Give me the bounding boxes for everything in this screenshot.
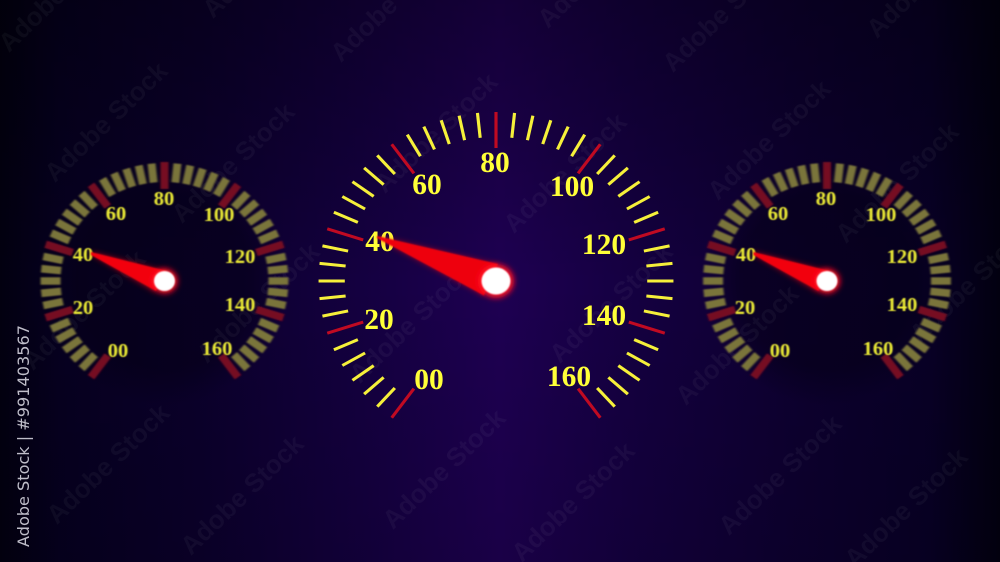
right gauge speed labels	[735, 188, 917, 362]
center gauge tick ring	[319, 112, 673, 418]
right gauge speed labels: 00	[770, 340, 790, 362]
right gauge	[703, 162, 951, 377]
center gauge speed labels: 120	[582, 229, 626, 261]
center gauge speed labels: 20	[364, 304, 394, 336]
watermark pattern: Adobe Stock	[829, 116, 965, 249]
center gauge needle	[377, 236, 514, 298]
left gauge speed labels: 80	[154, 188, 174, 210]
left gauge speed labels: 100	[204, 204, 234, 226]
right gauge needle	[754, 252, 840, 294]
watermark pattern: Adobe Stock	[376, 402, 512, 535]
left gauge speed labels: 60	[106, 203, 126, 225]
right gauge speed labels: 160	[863, 338, 893, 360]
watermark pattern: Adobe Stock	[712, 408, 848, 541]
watermark pattern: Adobe Stock	[701, 73, 837, 206]
left gauge tick ring	[41, 162, 288, 377]
center gauge speed labels: 60	[412, 169, 442, 201]
watermark pattern: Adobe Stock	[343, 256, 479, 389]
right gauge speed labels: 100	[866, 204, 896, 226]
left gauge needle	[91, 252, 178, 294]
center gauge speed labels: 140	[582, 300, 626, 332]
watermark pattern: Adobe Stock	[368, 66, 504, 199]
right gauge tick ring	[703, 162, 951, 377]
left gauge speed labels: 160	[202, 338, 232, 360]
left gauge speed labels: 140	[225, 294, 255, 316]
left gauge speed labels	[73, 188, 255, 362]
watermark pattern: Adobe Stock	[165, 96, 301, 229]
right gauge speed labels: 20	[735, 297, 755, 319]
watermark pattern: Adobe Stock	[16, 243, 152, 376]
left gauge speed labels: 00	[108, 340, 128, 362]
left gauge speed labels: 40	[73, 244, 93, 266]
center gauge speed labels: 100	[550, 171, 594, 203]
watermark pattern: Adobe Stock	[38, 55, 174, 188]
watermark pattern: Adobe Stock	[40, 397, 176, 530]
stock id vertical text: Adobe Stock | #991403567	[14, 325, 33, 547]
watermark pattern: Adobe Stock	[174, 428, 310, 561]
watermark pattern: Adobe Stock	[543, 236, 679, 369]
right gauge speed labels: 60	[768, 203, 788, 225]
center gauge	[319, 112, 673, 418]
center gauge speed labels: 80	[480, 147, 510, 179]
watermark pattern: Adobe Stock	[497, 106, 633, 239]
right gauge speed labels: 120	[887, 246, 917, 268]
center gauge speed labels: 00	[414, 364, 444, 396]
center gauge speed labels: 40	[365, 226, 395, 258]
center gauge speed labels: 160	[547, 361, 591, 393]
center gauge speed labels	[364, 147, 626, 396]
right gauge speed labels: 40	[736, 244, 756, 266]
watermark pattern: Adobe Stock	[669, 278, 805, 411]
right gauge speed labels: 140	[887, 294, 917, 316]
right gauge speed labels: 80	[816, 188, 836, 210]
left gauge	[41, 162, 288, 377]
left gauge speed labels: 20	[73, 297, 93, 319]
left gauge speed labels: 120	[225, 246, 255, 268]
watermark pattern: Adobe Stock	[190, 236, 326, 369]
